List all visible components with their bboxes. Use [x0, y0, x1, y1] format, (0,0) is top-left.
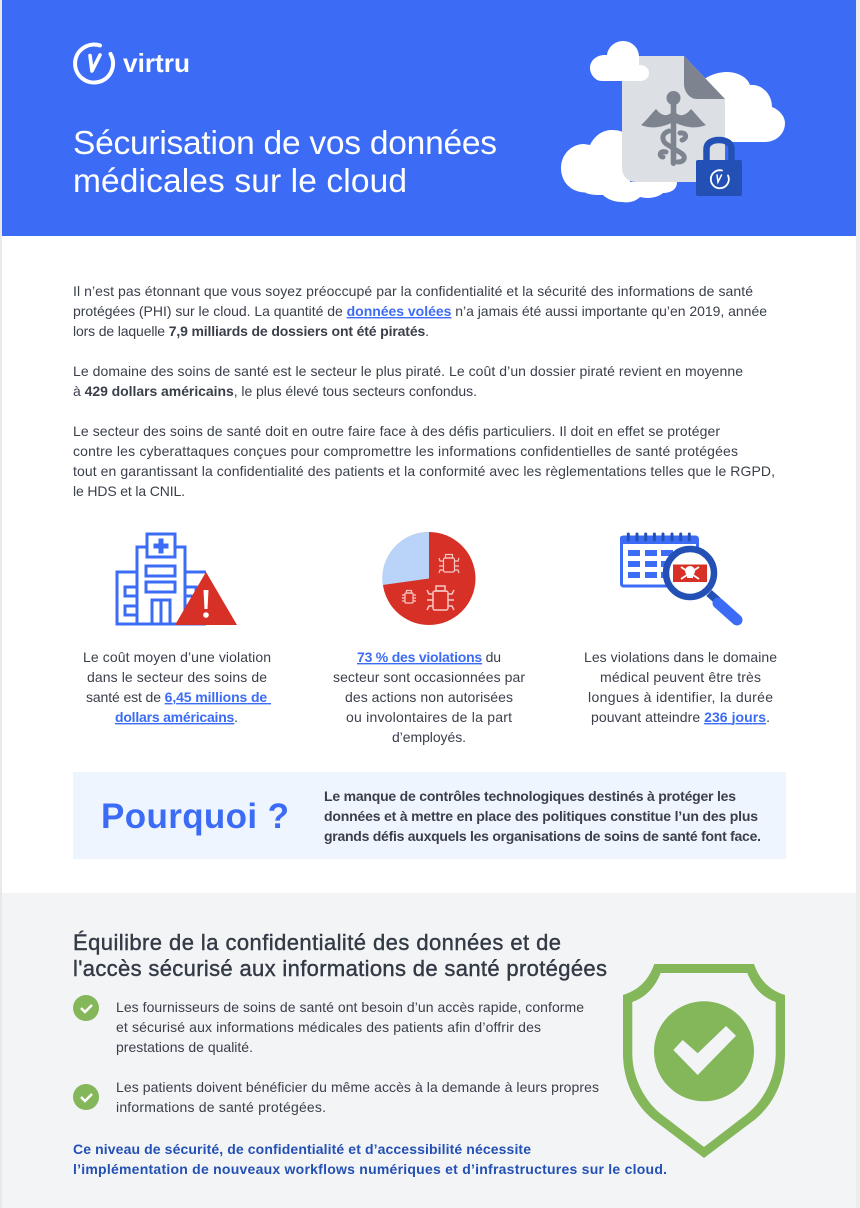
text: pourquoi explanation: Le manque de contrôles technologiques destinés à protéger les	[324, 788, 736, 804]
text block: introduction: protégées (PHI) sur le cloud. La quantité de données volées n’a jamais été aussi importante qu’en 2019, année	[73, 303, 767, 319]
text block: introduction: contre les cyberattaques conçues pour compromettre les informations confidentielles de santé protégées	[73, 443, 738, 459]
text: bullet 1	[116, 999, 584, 1055]
chart: pie 73 percent	[382, 532, 476, 625]
icon: bottom left cloud	[561, 130, 677, 202]
text: employee breaches: ou involontaires de la part	[346, 709, 512, 725]
text block: introduction: lors de laquelle 7,9 milliards de dossiers ont été piratés.	[73, 323, 429, 339]
text: detection time: médical peuvent être très	[600, 669, 761, 685]
text: bullet 1: Les fournisseurs de soins de santé ont besoin d’un accès rapide, conforme	[116, 999, 584, 1015]
text: detection time	[584, 649, 777, 725]
text: employee breaches: 73 % des violations du	[357, 649, 501, 665]
heading: section title: Équilibre de la confidentialité des données et de	[73, 930, 561, 955]
text block: introduction: le HDS et la CNIL.	[73, 483, 185, 499]
icon: check bullet 2	[73, 1084, 99, 1110]
text: bullet 1: prestations de qualité.	[116, 1039, 253, 1055]
callout: pourquoi	[73, 772, 786, 859]
panel: balance of privacy and access	[2, 893, 856, 1208]
icon: document	[622, 56, 725, 182]
text block: introduction: tout en garantissant la confidentialité des patients et la conformité avec les règlementations telles que le RGPD,	[73, 463, 775, 479]
heading: pourquoi: Pourquoi ?	[101, 797, 289, 836]
heading: section title: l'accès sécurisé aux informations de santé protégées	[73, 956, 607, 981]
text block: introduction: à 429 dollars américains, le plus élevé tous secteurs confondus.	[73, 383, 477, 399]
text: detection time: longues à identifier, la durée	[588, 689, 773, 705]
panel: detection time statistic	[584, 534, 777, 725]
text: cost of a breach: Le coût moyen d’une violation	[83, 649, 271, 665]
text: conclusion: l’implémentation de nouveaux workflows numériques et d’infrastructures sur le cloud.	[73, 1161, 667, 1177]
logo: virtru: virtru	[123, 48, 190, 78]
title: médicales sur le cloud	[73, 163, 407, 200]
text block: introduction	[73, 283, 775, 499]
title	[73, 125, 497, 200]
text: bullet 2: informations de santé protégées.	[116, 1099, 326, 1115]
text block: introduction: Il n’est pas étonnant que vous soyez préoccupé par la confidentialité et la sécurité des informations de santé	[73, 283, 753, 299]
icon: calendar with magnifier	[620, 534, 737, 620]
text: bullet 1: et sécurisé aux informations médicales des patients afin d’offrir des	[116, 1019, 541, 1035]
panel: cost statistic	[83, 534, 271, 725]
text: employee breaches	[333, 649, 525, 745]
text: bullet 2: Les patients doivent bénéficier du même accès à la demande à leurs propres	[116, 1079, 599, 1095]
icon: padlock	[696, 140, 742, 196]
icon: skull	[681, 566, 699, 579]
text: employee breaches: secteur sont occasionnées par	[333, 669, 525, 685]
icon: caduceus	[641, 91, 706, 166]
text: conclusion	[73, 1141, 667, 1177]
icon: check bullet 1	[73, 995, 99, 1021]
icon: top left cloud	[590, 41, 649, 81]
heading: section title	[73, 930, 607, 981]
text: bullet 2	[116, 1079, 599, 1115]
text: cost of a breach: santé est de 6,45 millions de	[86, 689, 271, 705]
icon: green shield with check	[623, 964, 785, 1158]
panel: header	[2, 0, 856, 236]
text block: introduction: Le domaine des soins de santé est le secteur le plus piraté. Le coût d’un dossier piraté revient en moyenne	[73, 363, 743, 379]
text: pourquoi explanation: données et à mettre en place des politiques constitue l’un des plus	[324, 808, 758, 824]
text: detection time: pouvant atteindre 236 jours.	[591, 709, 770, 725]
text: cost of a breach	[83, 649, 271, 725]
text: pourquoi explanation	[324, 788, 761, 844]
text block: introduction: Le secteur des soins de santé doit en outre faire face à des défis particuliers. Il doit en effet se protéger	[73, 423, 720, 439]
icon: right cloud	[700, 72, 785, 142]
text: conclusion: Ce niveau de sécurité, de confidentialité et d’accessibilité nécessite	[73, 1141, 531, 1157]
text: cost of a breach: dollars américains.	[115, 709, 238, 725]
text: employee breaches: des actions non autorisées	[345, 689, 513, 705]
title: Sécurisation de vos données	[73, 125, 497, 162]
text: detection time: Les violations dans le domaine	[584, 649, 777, 665]
text: cost of a breach: dans le secteur des soins de	[87, 669, 267, 685]
illustration: medical document, clouds and padlock	[561, 41, 785, 202]
text: employee breaches: d’employés.	[392, 729, 466, 745]
text: pourquoi explanation: grands défis auxquels les organisations de soins de santé font face.	[324, 828, 761, 844]
icon: bugs	[402, 554, 459, 610]
panel: employee statistic	[333, 532, 525, 745]
logo: virtru	[75, 45, 190, 83]
icon: hospital with warning triangle	[117, 534, 237, 625]
